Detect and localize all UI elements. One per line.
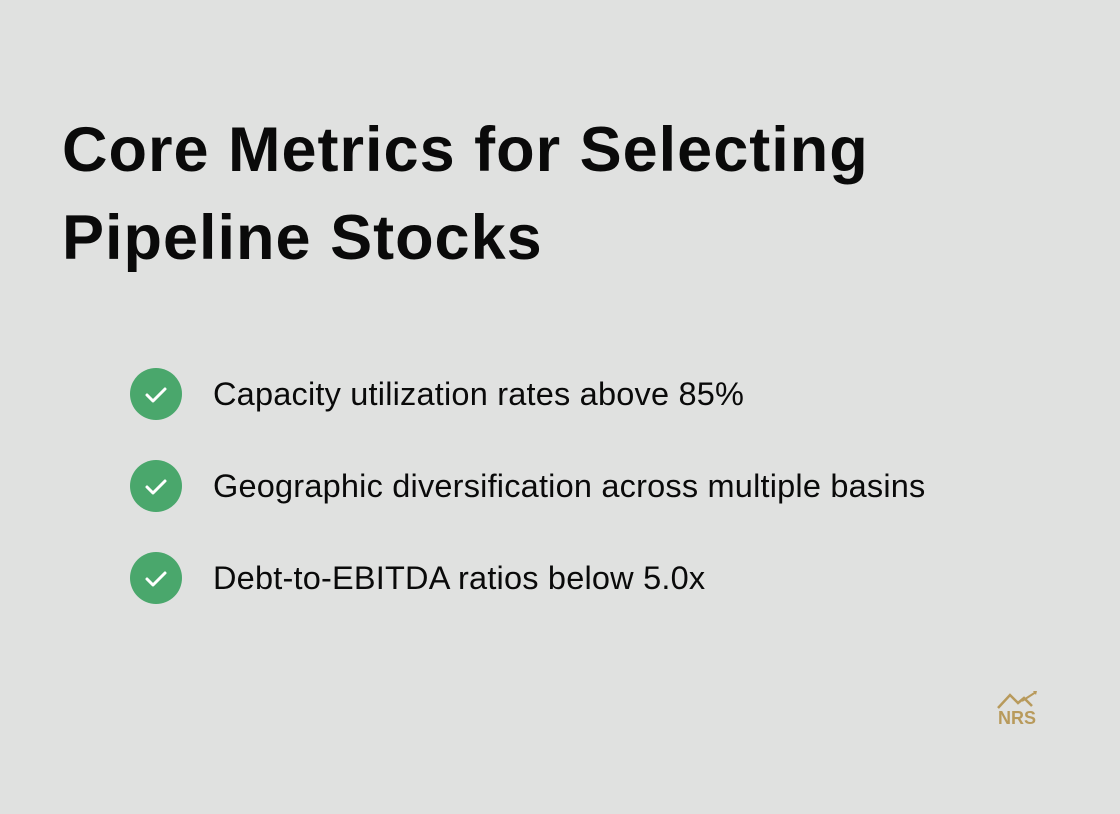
title	[62, 115, 869, 273]
item: geographic	[130, 460, 926, 512]
item: debt	[130, 552, 705, 604]
text: Capacity utilization rates above 85%	[213, 376, 744, 412]
icon: check	[130, 552, 182, 604]
title: Pipeline Stocks	[62, 203, 543, 273]
icon: check	[130, 460, 182, 512]
title: Core Metrics for Selecting	[62, 115, 869, 185]
item: capacity	[130, 368, 744, 420]
icon: check	[130, 368, 182, 420]
text: Geographic diversification across multiple basins	[213, 468, 926, 504]
logo: NRS: NRS	[998, 708, 1036, 728]
logo: NRS	[997, 691, 1037, 728]
text: Debt-to-EBITDA ratios below 5.0x	[213, 560, 705, 596]
